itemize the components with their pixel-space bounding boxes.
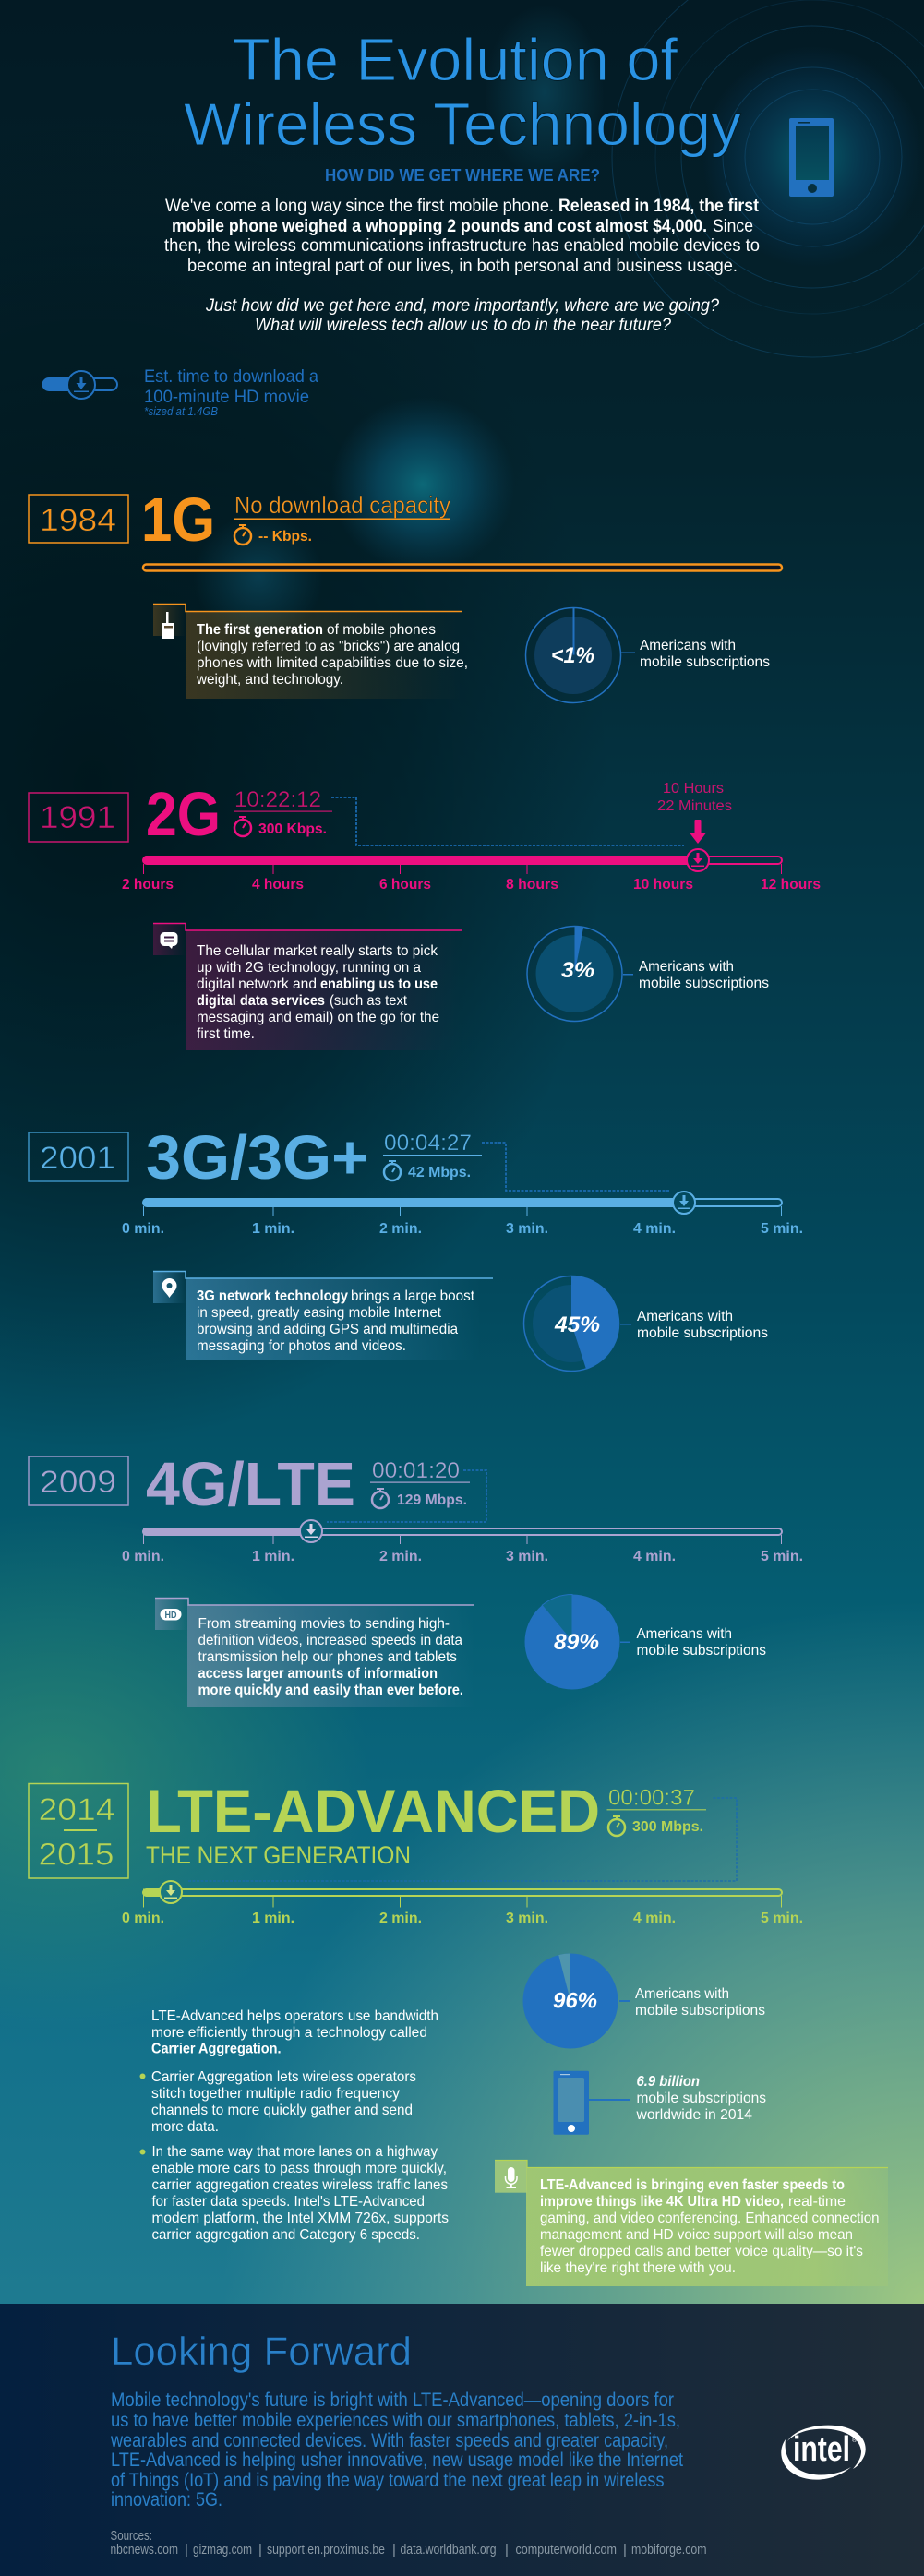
- intro text: We've come a long way since the first mobile phone.: [165, 197, 554, 216]
- timeline labels: [122, 1221, 803, 1237]
- year box 1984: [29, 495, 128, 543]
- callout text: From streaming movies to sending high-: [198, 1616, 450, 1632]
- timeline labels: [122, 877, 821, 893]
- dashed connector: [482, 1143, 670, 1191]
- logo: intel: ®: [852, 2437, 858, 2444]
- icon: HD badge: HD: [164, 1611, 177, 1621]
- download time 00:01:20: 00:01:20: [372, 1458, 460, 1483]
- download time label: No download capacity: [234, 491, 450, 519]
- timeline labels: 3 min.: [506, 1549, 548, 1564]
- timeline labels: 1 min.: [252, 1549, 294, 1564]
- callout: first generation: [153, 604, 468, 699]
- sources: |: [623, 2542, 627, 2558]
- timeline labels: 3 min.: [506, 1911, 548, 1926]
- body text: of Things (IoT) and is paving the way toward the next great leap in wireless: [111, 2470, 665, 2491]
- callout text: phones with limited capabilities due to size,: [197, 655, 468, 671]
- timeline labels: 4 min.: [633, 1911, 676, 1926]
- intro text: [164, 197, 760, 276]
- pie chart: 45%: [524, 1276, 619, 1372]
- title: [184, 26, 742, 158]
- speed: 129 Mbps.: [397, 1492, 467, 1508]
- body text: Mobile technology's future is bright with LTE-Advanced—opening doors for: [111, 2390, 674, 2411]
- callout text: [540, 2177, 879, 2276]
- label: mobile subscriptions: mobile subscriptions: [639, 976, 769, 991]
- section: 2G: [29, 780, 821, 1050]
- legend text: Est. time to download a: [144, 367, 318, 387]
- logo: intel: [781, 2426, 866, 2480]
- callout text: (lovingly referred to as "bricks") are analog: [197, 639, 460, 654]
- section: 1G: [29, 485, 782, 703]
- label: mobile subscriptions: mobile subscriptions: [635, 2003, 765, 2019]
- icon: download marker: [687, 849, 709, 871]
- download time 10:22:12: 10:22:12: [234, 787, 321, 812]
- callout text: access larger amounts of information: [198, 1666, 438, 1682]
- callout text: [198, 1616, 463, 1698]
- year box 2014-2015: 2015: [39, 1837, 114, 1872]
- sources: |: [258, 2542, 262, 2558]
- icon: stopwatch: [608, 1816, 625, 1836]
- year box 2001: 2001: [40, 1141, 115, 1176]
- stat: worldwide subscriptions: 6.9 billion: [637, 2074, 700, 2090]
- year box 1991: [29, 793, 128, 842]
- callout text: browsing and adding GPS and multimedia: [197, 1322, 458, 1337]
- label: mobile subscriptions: Americans with: [637, 1309, 733, 1324]
- icon: stopwatch: [234, 525, 251, 545]
- timeline bar: [143, 1881, 782, 1907]
- callout text: fewer dropped calls and better voice quality—so it's: [540, 2244, 863, 2259]
- icon: brick phone: [162, 612, 174, 639]
- callout text: 3G network technology: [197, 1288, 348, 1304]
- label: mobile subscriptions: [620, 1309, 768, 1341]
- callout: high-definition: [155, 1598, 475, 1707]
- pie chart: 3%: [527, 927, 622, 1021]
- year box 2014-2015: [29, 1783, 128, 1878]
- pie chart: 96%: [522, 1953, 618, 2049]
- year box 2001: [29, 1132, 128, 1181]
- intro text: Released in 1984, the first: [558, 197, 760, 216]
- sources: [111, 2528, 707, 2558]
- legend text: 100-minute HD movie: [144, 388, 309, 407]
- download time 00:04:27: 00:04:27: [384, 1131, 472, 1156]
- timeline labels: 12 hours: [761, 877, 821, 893]
- label: mobile subscriptions: [623, 959, 769, 991]
- callout text: transmission help our phones and tablets: [198, 1649, 457, 1665]
- callout text: messaging for photos and videos.: [197, 1338, 406, 1354]
- timeline labels: [122, 1911, 803, 1926]
- callout text: enabling us to use: [320, 976, 438, 992]
- callout text: improve things like 4K Ultra HD video,: [540, 2194, 784, 2210]
- sources: support.en.proximus.be: [267, 2542, 385, 2558]
- intro text: mobile phone weighed a whopping 2 pounds and cost almost $4,000.: [172, 217, 707, 236]
- icon: download slider: [42, 371, 117, 399]
- dashed connector: [327, 1470, 486, 1522]
- icon: microphone: [506, 2167, 517, 2188]
- icon: download marker: [160, 1881, 182, 1903]
- callout text: [197, 1288, 475, 1354]
- timeline labels: 4 hours: [252, 877, 304, 893]
- timeline labels: 5 min.: [761, 1221, 803, 1237]
- label: mobile subscriptions: Americans with: [640, 638, 736, 653]
- download time 00:00:37: 00:00:37: [608, 1785, 695, 1811]
- bullet two: [140, 2144, 449, 2243]
- sources: data.worldbank.org: [401, 2542, 497, 2558]
- callout text: first time.: [197, 1026, 255, 1042]
- stat: worldwide subscriptions: worldwide in 2014: [636, 2107, 752, 2123]
- callout text: of mobile phones: [327, 622, 436, 638]
- label: mobile subscriptions: [619, 1986, 765, 2019]
- sources: mobiforge.com: [631, 2542, 707, 2558]
- callout text: weight, and technology.: [196, 672, 343, 688]
- text block: carrier aggregation: Carrier Aggregation.: [151, 2042, 281, 2056]
- timeline labels: 3 min.: [506, 1221, 548, 1237]
- label: mobile subscriptions: [620, 1626, 766, 1659]
- label: mobile subscriptions: Americans with: [637, 1626, 732, 1642]
- timeline bar: [143, 1192, 782, 1216]
- timeline labels: 0 min.: [122, 1549, 164, 1564]
- callout text: messaging and email) on the go for the: [197, 1010, 439, 1025]
- icon: chat bubble: [161, 932, 177, 949]
- callout text: like they're right there with you.: [540, 2260, 736, 2276]
- legend text: [144, 367, 318, 418]
- speed: 300 Kbps.: [258, 821, 327, 837]
- timeline labels: 6 hours: [379, 877, 431, 893]
- bullet two: carrier aggregation and Category 6 speeds.: [151, 2227, 420, 2243]
- callout text: digital network and: [197, 976, 317, 992]
- sources: gizmag.com: [193, 2542, 252, 2558]
- bullet one: channels to more quickly gather and send: [151, 2103, 413, 2118]
- sources: computerworld.com: [515, 2542, 617, 2558]
- sources: Sources:: [111, 2528, 152, 2544]
- title: Wireless Technology: [184, 90, 742, 158]
- bullet two: carrier aggregation creates wireless traffic lanes: [151, 2177, 448, 2193]
- year box 2014-2015: 2014: [39, 1792, 114, 1827]
- callout text: management and HD voice support will also mean: [540, 2227, 853, 2243]
- section: 3G: [29, 1123, 803, 1372]
- icon: download marker: [300, 1520, 322, 1542]
- speed: 300 Mbps.: [632, 1819, 703, 1835]
- callout text: in speed, greatly easing mobile Internet: [197, 1305, 442, 1321]
- label: mobile subscriptions: Americans with: [635, 1986, 729, 2002]
- timeline bar: [143, 565, 782, 570]
- heading 2G: 2G: [146, 780, 221, 849]
- callout text: gaming, and video conferencing. Enhanced connection: [540, 2211, 879, 2226]
- callout text: digital data services: [197, 993, 325, 1009]
- title: The Evolution of: [233, 26, 678, 93]
- timeline labels: [122, 1549, 803, 1564]
- timeline labels: 1 min.: [252, 1221, 294, 1237]
- icon: stopwatch: [372, 1489, 389, 1508]
- label: mobile subscriptions: [621, 638, 770, 670]
- pie chart: 96%: 96%: [553, 1988, 597, 2014]
- bullet one: [140, 2069, 416, 2135]
- icon: smartphone: [789, 118, 834, 197]
- timeline labels: 2 hours: [122, 877, 174, 893]
- callout: cellular market: [153, 923, 462, 1050]
- timeline bar: [143, 849, 782, 874]
- callout label: 10 hours 22 minutes: 22 Minutes: [657, 798, 732, 814]
- year box 1991: 1991: [40, 800, 115, 835]
- speed: -- Kbps.: [258, 529, 312, 545]
- callout text: definition videos, increased speeds in data: [198, 1633, 462, 1648]
- timeline labels: 8 hours: [506, 877, 558, 893]
- label: mobile subscriptions: mobile subscriptions: [637, 1643, 766, 1659]
- callout label: 10 hours 22 minutes: 10 Hours: [663, 781, 724, 797]
- speed: 42 Mbps.: [408, 1165, 471, 1180]
- bullet one: stitch together multiple radio frequency: [151, 2086, 400, 2102]
- body text: innovation: 5G.: [111, 2489, 222, 2510]
- text block: carrier aggregation: more efficiently through a technology called: [151, 2025, 427, 2041]
- bullet two: enable more cars to pass through more quickly,: [151, 2161, 447, 2176]
- bullet one: Carrier Aggregation lets wireless operators: [151, 2069, 416, 2085]
- callout text: (such as text: [330, 993, 408, 1009]
- pie chart: 3%: 3%: [561, 958, 594, 983]
- icon: HD badge: [161, 1609, 181, 1621]
- intro question: What will wireless tech allow us to do in the near future?: [255, 316, 671, 335]
- label: mobile subscriptions: mobile subscriptions: [637, 1325, 768, 1341]
- intro text: become an integral part of our lives, in both personal and business usage.: [187, 257, 738, 276]
- text block: carrier aggregation: [140, 2008, 449, 2243]
- callout text: real-time: [788, 2194, 846, 2210]
- icon: map pin: [162, 1278, 177, 1298]
- icon: stopwatch: [234, 817, 251, 836]
- timeline labels: 2 min.: [379, 1911, 422, 1926]
- year box 2009: 2009: [40, 1465, 116, 1500]
- callout text: The cellular market really starts to pick: [197, 943, 438, 959]
- year box 1984: 1984: [40, 503, 116, 538]
- decorative signal rings with phone: [612, 0, 924, 357]
- callout text: LTE-Advanced is bringing even faster speeds to: [540, 2177, 845, 2193]
- timeline labels: 0 min.: [122, 1911, 164, 1926]
- label: mobile subscriptions: mobile subscriptions: [640, 654, 770, 670]
- callout label: 10 hours 22 minutes: [657, 781, 732, 814]
- timeline labels: 2 min.: [379, 1221, 422, 1237]
- subheading: THE NEXT GENERATION: [146, 1841, 411, 1869]
- timeline labels: 4 min.: [633, 1549, 676, 1564]
- callout text: [196, 622, 468, 688]
- bullet one: more data.: [151, 2119, 219, 2135]
- body text: us to have better mobile experiences with our smartphones, tablets, 2-in-1s,: [111, 2410, 680, 2431]
- section: LTE-Advanced: [29, 1777, 888, 2286]
- year box 2009: [29, 1456, 128, 1505]
- pie chart: less than 1%: <1%: [551, 643, 594, 668]
- heading 3G/3G+: 3G/3G+: [146, 1123, 368, 1192]
- text block: carrier aggregation: LTE-Advanced helps operators use bandwidth: [151, 2008, 438, 2024]
- timeline labels: 5 min.: [761, 1549, 803, 1564]
- heading 1G: 1G: [141, 485, 215, 555]
- sources: |: [505, 2542, 509, 2558]
- body text: [110, 2390, 683, 2510]
- bullet two: In the same way that more lanes on a highway: [151, 2144, 438, 2160]
- intro question: Just how did we get here and, more importantly, where are we going?: [205, 296, 719, 316]
- heading: Looking Forward: [111, 2330, 412, 2374]
- intro text: Since: [713, 217, 753, 236]
- sources: |: [392, 2542, 396, 2558]
- subtitle: HOW DID WE GET WHERE WE ARE?: [325, 166, 600, 185]
- stat: worldwide subscriptions: [636, 2074, 766, 2123]
- dashed connector: [187, 1798, 737, 1881]
- timeline labels: 5 min.: [761, 1911, 803, 1926]
- stat: worldwide subscriptions: mobile subscriptions: [637, 2091, 766, 2106]
- panel: looking forward: [0, 2304, 924, 2576]
- arrow: marker: [690, 820, 705, 844]
- callout text: [197, 943, 439, 1042]
- icon: stopwatch: [384, 1161, 401, 1180]
- sources: |: [185, 2542, 188, 2558]
- body text: wearables and connected devices. With faster speeds and greater capacity,: [110, 2430, 668, 2451]
- dashed connector: [331, 797, 684, 845]
- intro text: then, the wireless communications infrastructure has enabled mobile devices to: [164, 236, 760, 256]
- label: mobile subscriptions: Americans with: [639, 959, 734, 975]
- legend: download time: [42, 367, 318, 418]
- callout: faster speeds: [495, 2160, 888, 2286]
- body text: LTE-Advanced is helping usher innovative, new usage model like the Internet: [111, 2450, 683, 2471]
- timeline labels: 10 hours: [633, 877, 693, 893]
- timeline bar: [143, 1520, 782, 1544]
- legend text: *sized at 1.4GB: [144, 404, 218, 418]
- pie chart: less than 1%: [526, 607, 620, 703]
- timeline labels: 0 min.: [122, 1221, 164, 1237]
- timeline labels: 1 min.: [252, 1911, 294, 1926]
- callout text: up with 2G technology, running on a: [197, 960, 421, 976]
- bullet two: modem platform, the Intel XMM 726x, supports: [151, 2211, 449, 2226]
- timeline labels: 4 min.: [633, 1221, 676, 1237]
- heading 4G/LTE: 4G/LTE: [146, 1450, 355, 1519]
- callout text: The first generation: [197, 622, 323, 638]
- callout text: brings a large boost: [351, 1288, 475, 1304]
- icon: download marker: [673, 1192, 695, 1214]
- section: 4G: [29, 1450, 803, 1707]
- callout text: more quickly and easily than ever before.: [198, 1683, 463, 1698]
- pie chart: 45%: 45%: [554, 1312, 600, 1337]
- callout: 3G network technology: [153, 1271, 493, 1360]
- pie chart: 89%: [524, 1595, 620, 1689]
- pie chart: 89%: 89%: [554, 1630, 599, 1655]
- icon: smartphone: [554, 2071, 630, 2135]
- timeline labels: 2 min.: [379, 1549, 422, 1564]
- logo: intel: intel: [793, 2430, 850, 2469]
- sources: nbcnews.com: [111, 2542, 178, 2558]
- bullet two: for faster data speeds. Intel's LTE-Advanced: [151, 2194, 425, 2210]
- heading LTE-ADVANCED: LTE-ADVANCED: [146, 1777, 600, 1845]
- intro question: [205, 296, 719, 335]
